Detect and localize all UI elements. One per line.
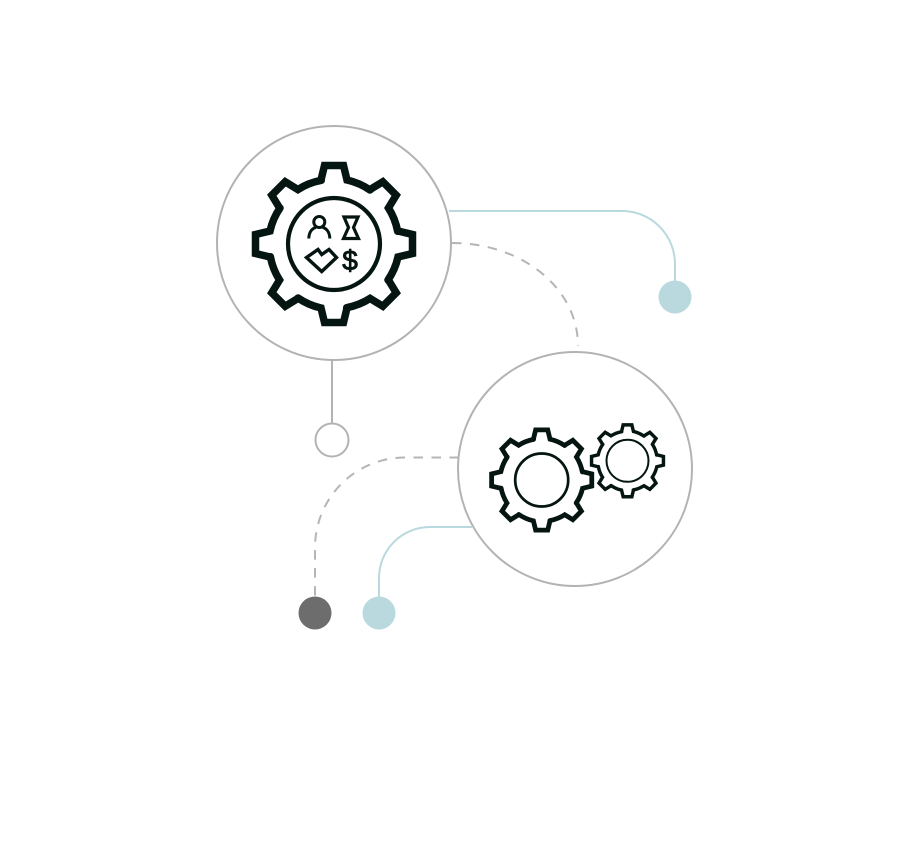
icon: person [309, 216, 330, 238]
gear outline [590, 424, 665, 498]
icon: large gear with resources [253, 163, 415, 325]
connector: teal line lower [379, 527, 472, 600]
node: dark grey dot [298, 596, 332, 630]
gear inner ring [288, 198, 380, 290]
connector: dashed curve lower left [315, 458, 459, 597]
gear outline [253, 163, 415, 325]
icon: small gear [590, 424, 665, 498]
connector: grey vertical line [331, 360, 333, 424]
gear inner ring [515, 454, 568, 506]
node: teal dot top right [658, 280, 692, 314]
panel: lower circle [458, 352, 692, 586]
gear inner ring [606, 440, 648, 482]
icon: dollar sign: $ [342, 245, 358, 276]
icon: heart diamond [306, 250, 336, 272]
connector: teal line top right [449, 211, 675, 297]
icon: hourglass [344, 217, 358, 238]
icon: medium gear [490, 428, 593, 532]
node: teal dot lower [362, 596, 396, 630]
connector: dashed curve between circles [452, 243, 578, 346]
panel: top circle [217, 126, 451, 360]
gear outline [490, 428, 593, 532]
node: hollow grey circle [316, 424, 348, 456]
